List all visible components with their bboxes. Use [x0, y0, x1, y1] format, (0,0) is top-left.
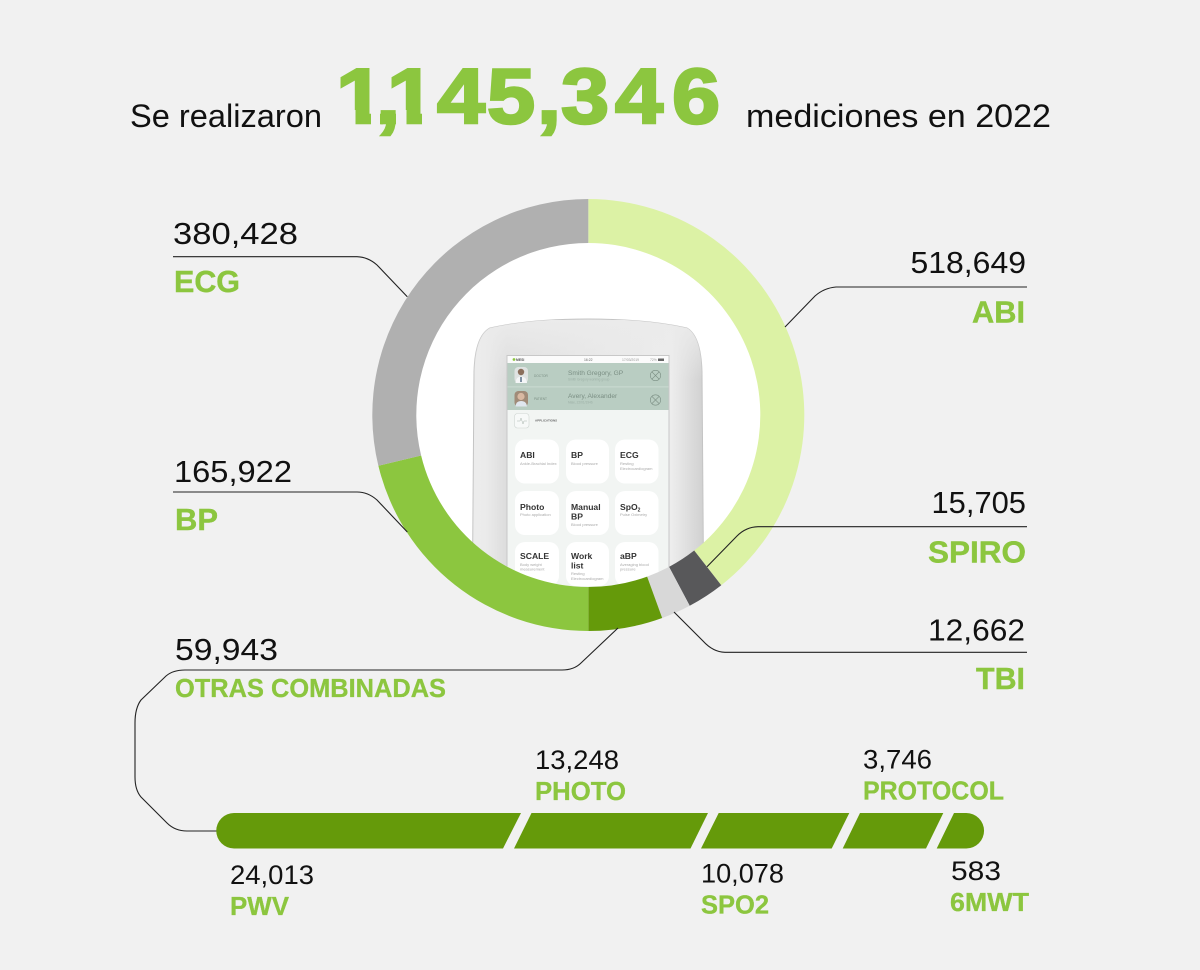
tablet screen: Male, 22/01/1946: [568, 400, 593, 404]
app cards: measurement: [520, 566, 545, 572]
callout: otras combinadas: OTRAS COMBINADAS: [175, 675, 446, 703]
callout: ABI: 518,649: [910, 245, 1026, 280]
bar segment: PROTOCOL: [843, 813, 943, 848]
title: 1,145,346: [336, 53, 720, 140]
callout: ABI: [785, 245, 1027, 330]
app cards: Electrocardiogram: [571, 576, 604, 581]
callout: ECG: [173, 216, 407, 299]
label: PWV: 24,013: [230, 860, 314, 890]
label: PHOTO: PHOTO: [535, 778, 626, 806]
tablet screen: [506, 355, 670, 596]
app cards: Blood pressure: [571, 461, 599, 466]
app cards: Ankle-Brachial Index: [520, 461, 557, 466]
title: Se realizaron: [130, 98, 322, 134]
callout: TBI: 12,662: [928, 613, 1025, 648]
label: PHOTO: 13,248: [535, 745, 619, 775]
app cards: Electrocardiogram: [620, 466, 653, 471]
callout: ECG: ECG: [174, 265, 240, 299]
avatar: patient: [514, 391, 528, 406]
callout: SPIRO: SPIRO: [928, 536, 1026, 570]
tablet screen: 17/03/2019: [622, 358, 639, 362]
callout: otras combinadas: [135, 628, 618, 831]
app cards: Work: [571, 551, 593, 561]
label: SPO2: 10,078: [701, 859, 784, 889]
tablet screen: Smith Gregory, GP: [568, 370, 624, 377]
app cards: SCALE: [520, 551, 549, 561]
label: 6MWT: [950, 856, 1029, 917]
callout: TBI: [674, 612, 1027, 696]
app cards: Photo application: [520, 512, 551, 517]
callout: ABI: ABI: [972, 296, 1025, 330]
tablet screen: DOCTOR: [534, 374, 548, 378]
app cards: list: [571, 560, 584, 570]
label: PHOTO: [535, 745, 626, 806]
app cards: BP: [571, 450, 583, 460]
app cards: ABI: [520, 450, 535, 460]
app cards: [515, 440, 658, 586]
tablet screen: APPLICATIONS: [535, 418, 557, 422]
label: PWV: [230, 860, 314, 921]
segment: TBI: [647, 567, 690, 618]
tablet device: [472, 318, 704, 587]
label: 6MWT: 6MWT: [950, 889, 1029, 917]
tablet screen: Smith Gregory working group: [568, 378, 610, 382]
app cards: 2: [638, 508, 641, 514]
app cards: BP: [571, 512, 583, 522]
avatar: doctor: [514, 367, 528, 383]
segmented bar: [216, 813, 984, 848]
app cards: Resting: [571, 571, 585, 576]
app cards: Averaging blood: [620, 562, 649, 567]
label: PWV: PWV: [230, 893, 289, 921]
app cards: aBP: [620, 551, 637, 561]
callout: SPIRO: 15,705: [932, 485, 1026, 520]
callout: BP: [173, 454, 407, 537]
label: PROTOCOL: 3,746: [863, 744, 932, 774]
callout: BP: BP: [175, 503, 218, 537]
app cards: ECG: [620, 450, 639, 460]
app cards: Pulse Oximetry: [620, 512, 647, 517]
label: PROTOCOL: PROTOCOL: [863, 778, 1004, 806]
title: [130, 53, 1051, 140]
tablet screen: Avery, Alexander: [568, 393, 618, 400]
callout: otras combinadas: 59,943: [175, 632, 278, 667]
title: mediciones en 2022: [746, 98, 1051, 134]
segment: otras combinadas: [588, 577, 662, 631]
tablet screen: 72%: [650, 358, 657, 362]
bar segment: PWV: [216, 813, 521, 848]
label: SPO2: [701, 859, 784, 920]
inner white circle: [415, 242, 761, 588]
bar segment: SPO2: [701, 813, 849, 848]
app cards: Manual: [571, 502, 601, 512]
segment: SPIRO: [669, 551, 721, 606]
tablet screen: PATIENT: [534, 397, 547, 401]
app cards: Body weight: [520, 562, 543, 567]
callout: TBI: TBI: [976, 662, 1025, 696]
segment: BP: [378, 455, 588, 631]
segment: ECG: [372, 199, 588, 466]
segment: ABI: [588, 199, 804, 585]
label: PROTOCOL: [863, 744, 1004, 806]
donut chart: [372, 199, 804, 631]
tablet screen: MESI: [516, 358, 524, 362]
tablet screen: 16:22: [584, 358, 593, 362]
app cards: Blood pressure: [571, 522, 599, 527]
label: 6MWT: 583: [951, 856, 1001, 886]
app cards: SpO: [620, 502, 638, 512]
callout: BP: 165,922: [174, 454, 292, 489]
icon: applications pulse: [514, 414, 529, 428]
app cards: Resting: [620, 461, 634, 466]
callout: SPIRO: [707, 485, 1027, 570]
label: SPO2: SPO2: [701, 892, 769, 920]
callout: ECG: 380,428: [173, 216, 298, 251]
bar segment: PHOTO: [514, 813, 708, 848]
app cards: Photo: [520, 502, 544, 512]
bar segment: 6MWT: [937, 813, 984, 848]
app cards: pressure: [620, 566, 636, 572]
